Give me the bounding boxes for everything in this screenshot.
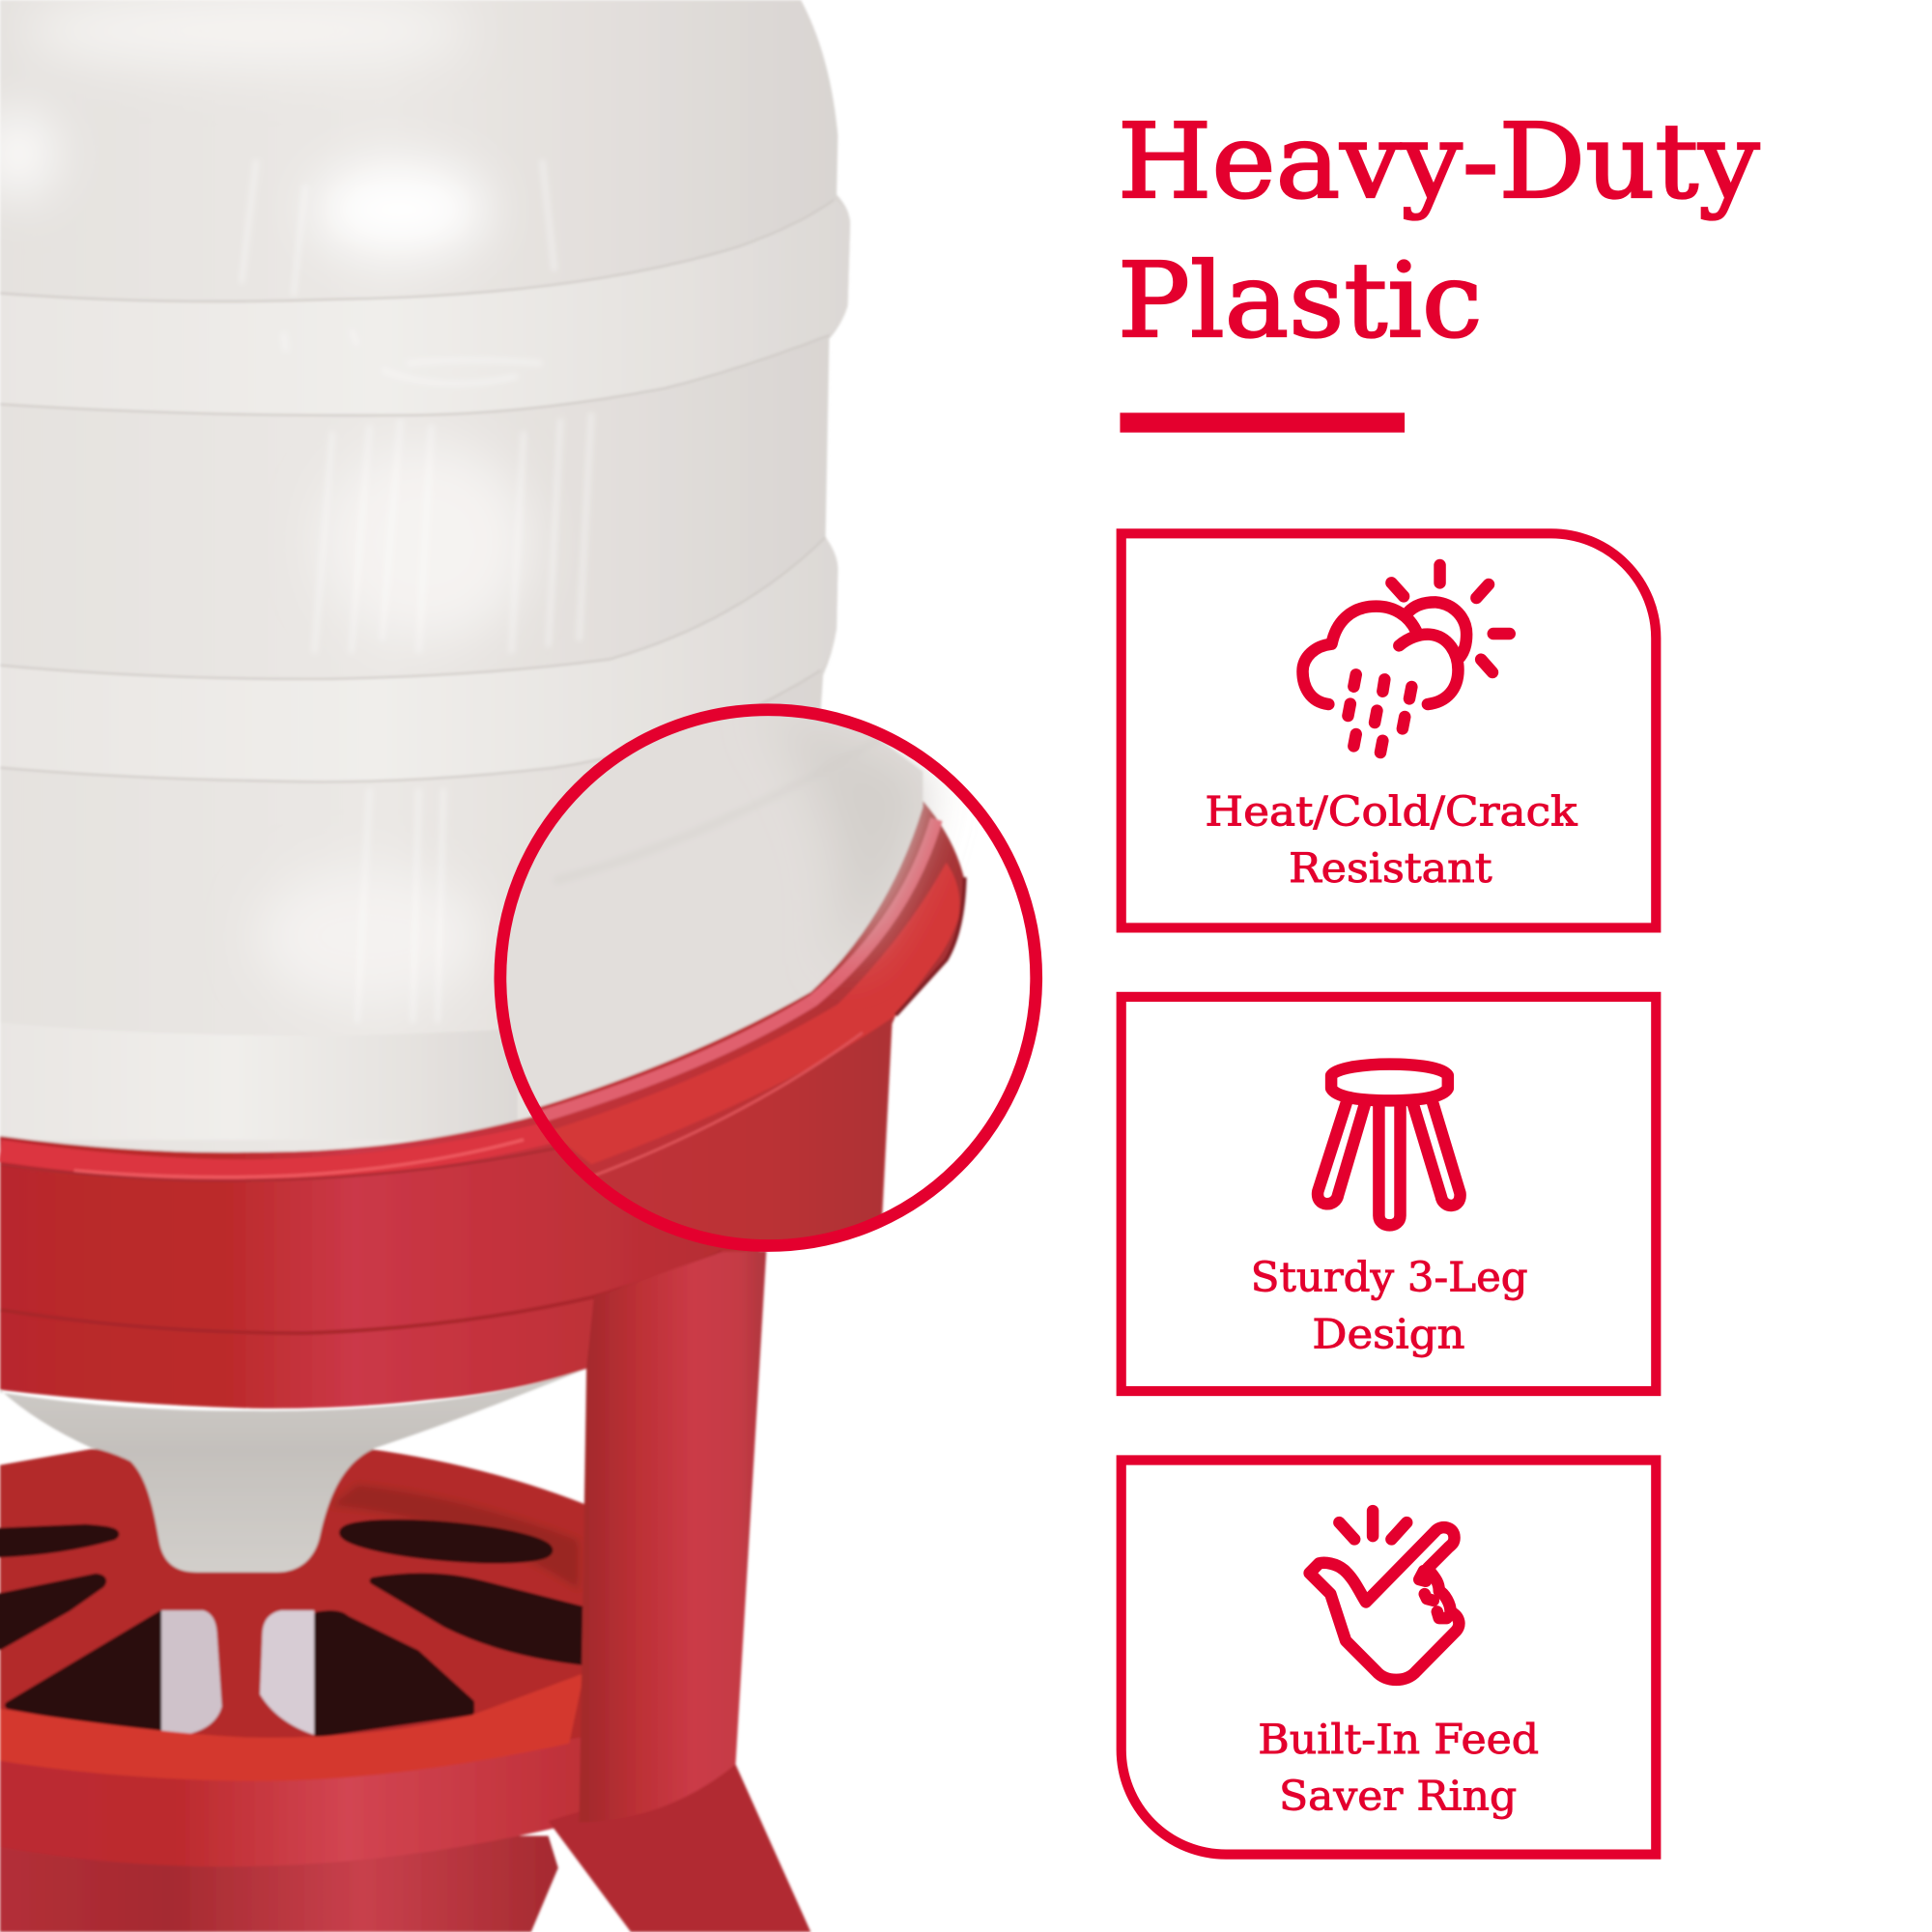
- upper red basin: [0, 1110, 788, 1408]
- plastic texture streaks: [242, 160, 591, 1023]
- basin crease: [0, 1252, 722, 1333]
- title: Heavy-Duty: [1118, 102, 1760, 222]
- panel: built-in feed saver ring: Saver Ring: [1279, 1773, 1517, 1820]
- circle ring: [500, 710, 1037, 1246]
- label: heat cold crack resistant: Heat/Cold/Crack: [1205, 788, 1577, 836]
- label: sturdy 3-leg design: Sturdy 3-Leg: [1251, 1254, 1528, 1301]
- rib edge lines: [0, 200, 835, 781]
- magnified view contents: [539, 719, 969, 1240]
- magnified faint rib: [554, 727, 899, 881]
- magnified bottle: [506, 716, 925, 1109]
- leg: [579, 1251, 766, 1822]
- icon: cloud sun rain: [1303, 565, 1510, 753]
- icon: hand snap: [1310, 1511, 1459, 1680]
- panel: built-in feed saver ring: [1122, 1460, 1656, 1855]
- magnifier circle: [469, 690, 1047, 1257]
- pan of the drinker: [0, 1449, 598, 1780]
- bottle shoulder highlights: [0, 0, 529, 1005]
- funnel: [0, 1369, 585, 1573]
- outer feed-ring band: [0, 1735, 594, 1866]
- panel: heat cold crack resistant: Resistant: [1289, 844, 1492, 892]
- panel: sturdy 3-leg design: Design: [1312, 1310, 1465, 1357]
- bottle lower rib: [0, 1023, 518, 1140]
- leg splay: [549, 1765, 810, 1932]
- icon: three-leg stool: [1318, 1065, 1461, 1225]
- feeder rim: [0, 1673, 584, 1781]
- panel: heat cold crack resistant: [1122, 533, 1656, 927]
- bottle upper rib: [0, 200, 850, 415]
- basin rim highlight: [0, 1131, 555, 1180]
- title underline: [1120, 412, 1405, 433]
- lower bowl: [0, 1836, 558, 1932]
- magnified bottle shading: [804, 734, 953, 982]
- magnified red rim and basin: [539, 801, 966, 1240]
- title: [1118, 102, 1760, 361]
- bottle body: [0, 0, 850, 1182]
- title: Plastic: [1118, 242, 1482, 361]
- panel: sturdy 3-leg design: [1122, 997, 1656, 1391]
- bottle middle rib: [0, 537, 838, 781]
- label: built-in feed saver ring: Built-In Feed: [1258, 1716, 1539, 1763]
- magnified bright rim: [549, 863, 959, 1164]
- product photo: poultry drinker: [0, 0, 850, 1932]
